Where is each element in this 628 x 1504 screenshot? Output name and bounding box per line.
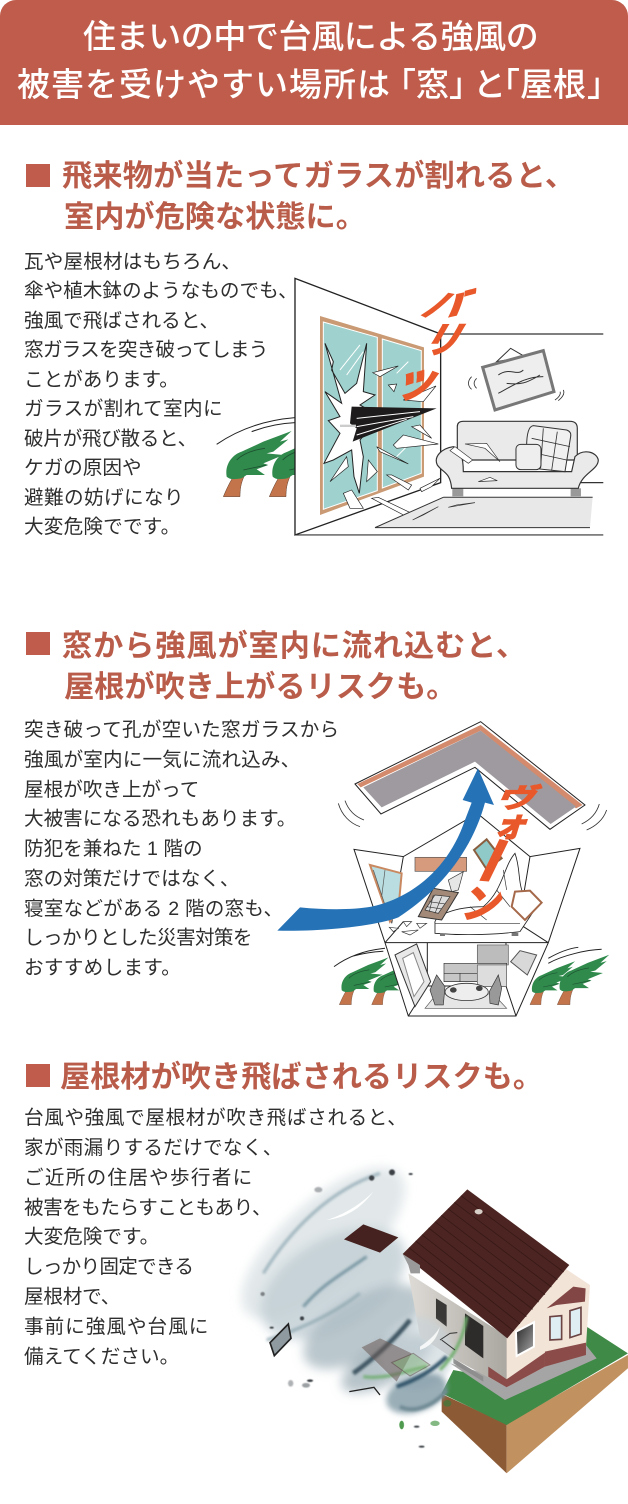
tornado back layer bbox=[219, 1143, 440, 1404]
text block: section 3 body: 台風や強風で屋根材が吹き飛ばされると、 家が雨漏りするだけでなく、 ご近所の住居や歩行者に 被害をもたらすこともあり、 大変危険です。 しっかり固定できる 屋根材で、 事前に強風や台風に 備えてください。 bbox=[24, 1107, 407, 1368]
roof section bbox=[338, 722, 607, 830]
onomatopoeia text: バ bbox=[414, 287, 480, 323]
panel: section 1 heading: 室内が危険な状態に。 bbox=[64, 201, 366, 234]
house cutaway bbox=[354, 813, 580, 1016]
upstairs furnishings bbox=[370, 839, 542, 936]
title bbox=[17, 18, 620, 103]
tornado front layer bbox=[353, 1317, 467, 1421]
rug bbox=[375, 497, 593, 528]
house bbox=[408, 1268, 597, 1400]
title: 被害を受けやすい場所は「窓」と「屋根」 bbox=[17, 66, 620, 103]
onomatopoeia text: ッ bbox=[388, 358, 449, 406]
illustration: tornado hitting house bbox=[219, 1143, 628, 1473]
panel: section 2 heading: 屋根が吹き上がるリスクも。 bbox=[64, 671, 456, 704]
panel: section 1 heading: 飛来物が当たってガラスが割れると、 bbox=[62, 160, 575, 193]
ground floor furnishings bbox=[395, 944, 537, 1008]
header banner bbox=[0, 0, 628, 125]
room walls bbox=[295, 278, 603, 535]
onomatopoeia text: リ bbox=[415, 321, 474, 361]
panel: section 3 heading: 屋根材が吹き飛ばされるリスクも。 bbox=[60, 1061, 543, 1094]
icon: wind lines and palm trees bbox=[217, 418, 338, 497]
text block: section 2 body: 突き破って孔が空いた窓ガラスから 強風が室内に一気に流れ込み、 屋根が吹き上がって 大被害になる恐れもあります。 防犯を兼ねた 1 階の 窓の対策だけではなく、 寝室などがある 2 階の窓も、 しっかりとした災害対策を おすすめします。 bbox=[24, 719, 339, 979]
onomatopoeia text: ン bbox=[458, 883, 508, 926]
arrow: wind bbox=[277, 768, 494, 931]
ground block bbox=[442, 1327, 628, 1473]
onomatopoeia text bbox=[458, 784, 545, 926]
roof bbox=[403, 1189, 569, 1338]
illustration: house cutaway with wind bbox=[277, 722, 609, 1016]
window frame and glass bbox=[320, 316, 424, 515]
picture frame bbox=[468, 348, 564, 410]
palm trees bbox=[334, 947, 609, 1005]
sofa bbox=[436, 421, 598, 496]
debris bbox=[261, 1169, 457, 1448]
illustration: shattered window room bbox=[217, 278, 603, 535]
panel: section 1 heading bbox=[26, 160, 575, 234]
title: 住まいの中で台風による強風の bbox=[83, 18, 538, 55]
icon: umbrella bbox=[340, 407, 437, 442]
panel: section 2 heading: 窓から強風が室内に流れ込むと、 bbox=[62, 630, 527, 663]
onomatopoeia text: ヴ bbox=[492, 784, 545, 814]
onomatopoeia text bbox=[388, 287, 480, 406]
text block: section 1 body: 瓦や屋根材はもちろん、 傘や植木鉢のようなものでも、 強風で飛ばされると、 窓ガラスを突き破ってしまう ことがあります。 ガラスが割れて室内に 破片が飛び散ると、 ケガの原因や 避難の妨げになり 大変危険でです。 bbox=[24, 251, 298, 538]
panel: section 2 heading bbox=[26, 630, 527, 704]
shattered glass bbox=[324, 343, 440, 517]
onomatopoeia text: ォ bbox=[490, 807, 535, 844]
